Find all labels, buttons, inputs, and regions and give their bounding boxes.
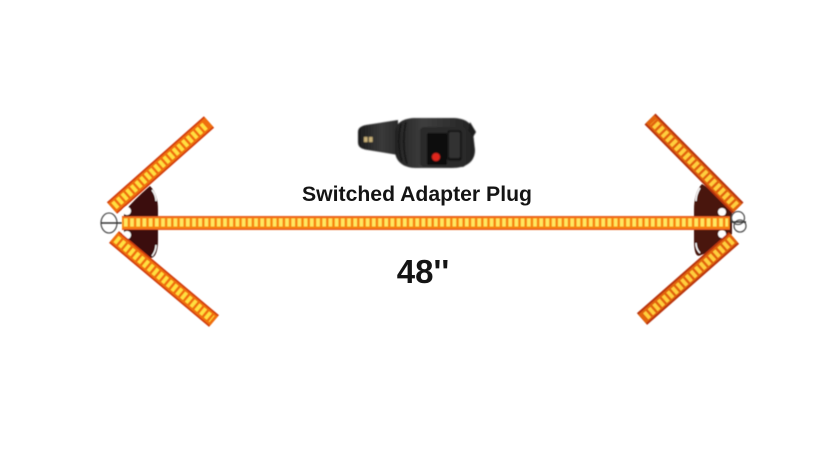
left mounting bracket bbox=[124, 186, 158, 258]
right upper LED arm bbox=[650, 119, 738, 208]
plug tip bbox=[358, 120, 398, 155]
right ring connector bbox=[728, 212, 746, 232]
red indicator bbox=[432, 153, 440, 161]
rocker switch bbox=[420, 127, 466, 167]
label: Switched Adapter Plug: Switched Adapter Plug bbox=[302, 183, 532, 206]
plug body bbox=[395, 118, 475, 168]
right mounting bracket bbox=[694, 184, 732, 256]
right lower LED arm bbox=[642, 238, 734, 319]
center LED bar bbox=[122, 216, 730, 230]
right arrow head bbox=[642, 119, 746, 319]
left upper LED arm bbox=[112, 122, 209, 208]
dimension label: 48 inches: 48'' bbox=[397, 253, 449, 290]
left ring connector bbox=[101, 213, 122, 233]
icon: switched adapter plug bbox=[358, 118, 476, 168]
left arrow head bbox=[101, 122, 214, 321]
left lower LED arm bbox=[114, 237, 214, 321]
